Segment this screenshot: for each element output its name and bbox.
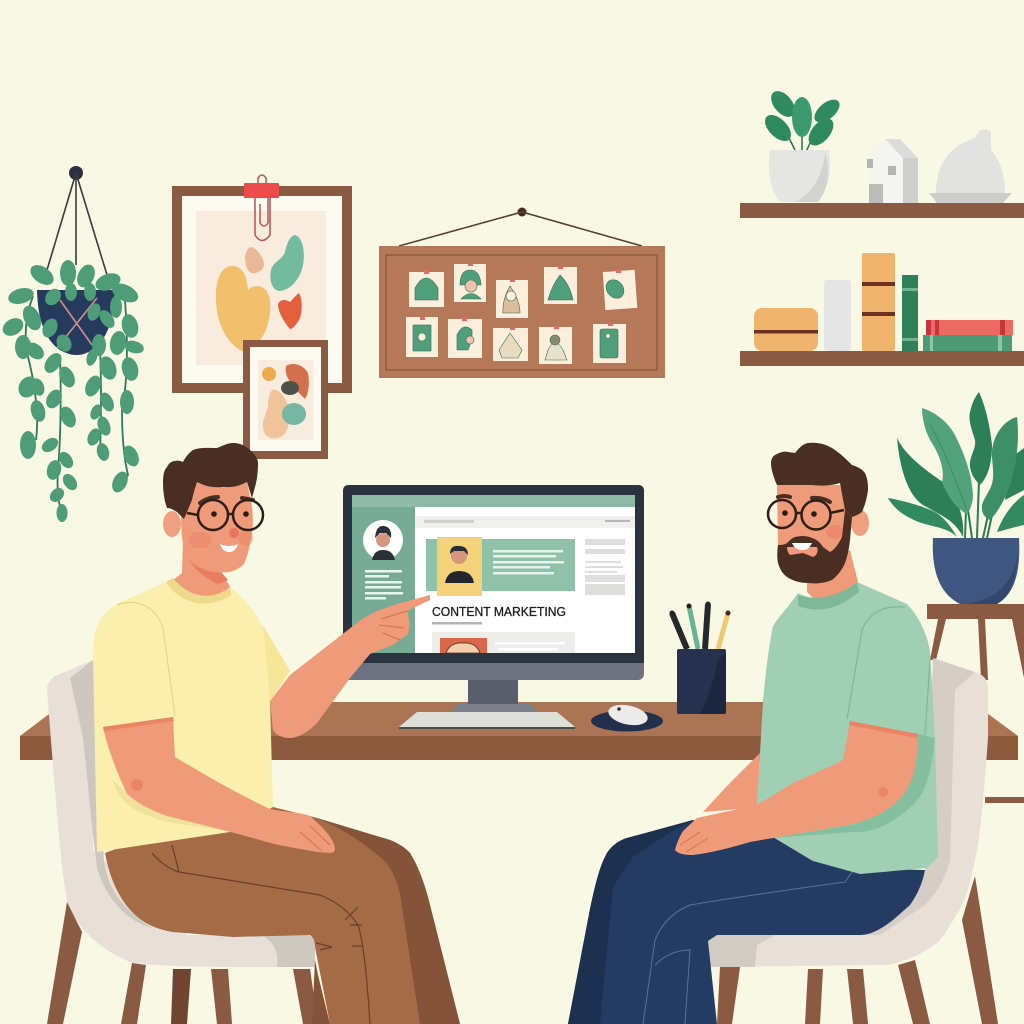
green banner with portrait card (426, 537, 575, 596)
desk (20, 702, 1018, 760)
head (768, 443, 869, 583)
person: right man in green shirt (568, 443, 938, 1024)
red pins (420, 263, 621, 330)
near arm and hands (675, 721, 918, 855)
chair: right person (708, 658, 998, 1024)
chair legs (47, 902, 318, 1024)
article card (432, 632, 575, 653)
profile avatar (363, 520, 403, 560)
head (163, 443, 263, 572)
mouse and mouse pad (591, 702, 663, 732)
heading on screen: CONTENT MARKETING (432, 604, 566, 619)
person: left man in yellow shirt (93, 443, 460, 1024)
plant stand (927, 604, 1024, 803)
neck (173, 540, 240, 602)
green t-shirt (757, 582, 938, 874)
icon: hanging plant (0, 166, 145, 522)
trousers (105, 807, 460, 1024)
trousers (568, 820, 925, 1024)
pen holder with pens (670, 602, 730, 714)
large potted plant (888, 392, 1024, 604)
pinboard with notes (379, 208, 665, 378)
glasses (768, 500, 844, 530)
picture frame: small abstract art (243, 340, 328, 459)
icon: red paper clip (244, 175, 279, 240)
far arm (703, 753, 760, 812)
neck (807, 550, 858, 605)
upper shelf with plant, house and cloche (740, 87, 1024, 218)
sidebar lines (365, 570, 403, 600)
monitor stand (452, 680, 537, 711)
picture frame: large abstract art (172, 186, 352, 393)
pinned notes (406, 264, 637, 364)
pointing arm and hand (270, 595, 430, 738)
yellow t-shirt (93, 578, 290, 852)
note drawings (413, 270, 628, 360)
arm resting on leg (103, 717, 335, 853)
beard (777, 510, 852, 583)
chair: left person (47, 660, 318, 1024)
glasses (187, 500, 263, 530)
keyboard (399, 712, 575, 729)
lower shelf with boxes and books (740, 253, 1024, 366)
monitor showing content marketing page (343, 485, 644, 711)
right column placeholders (585, 539, 625, 595)
chair legs (717, 876, 998, 1024)
